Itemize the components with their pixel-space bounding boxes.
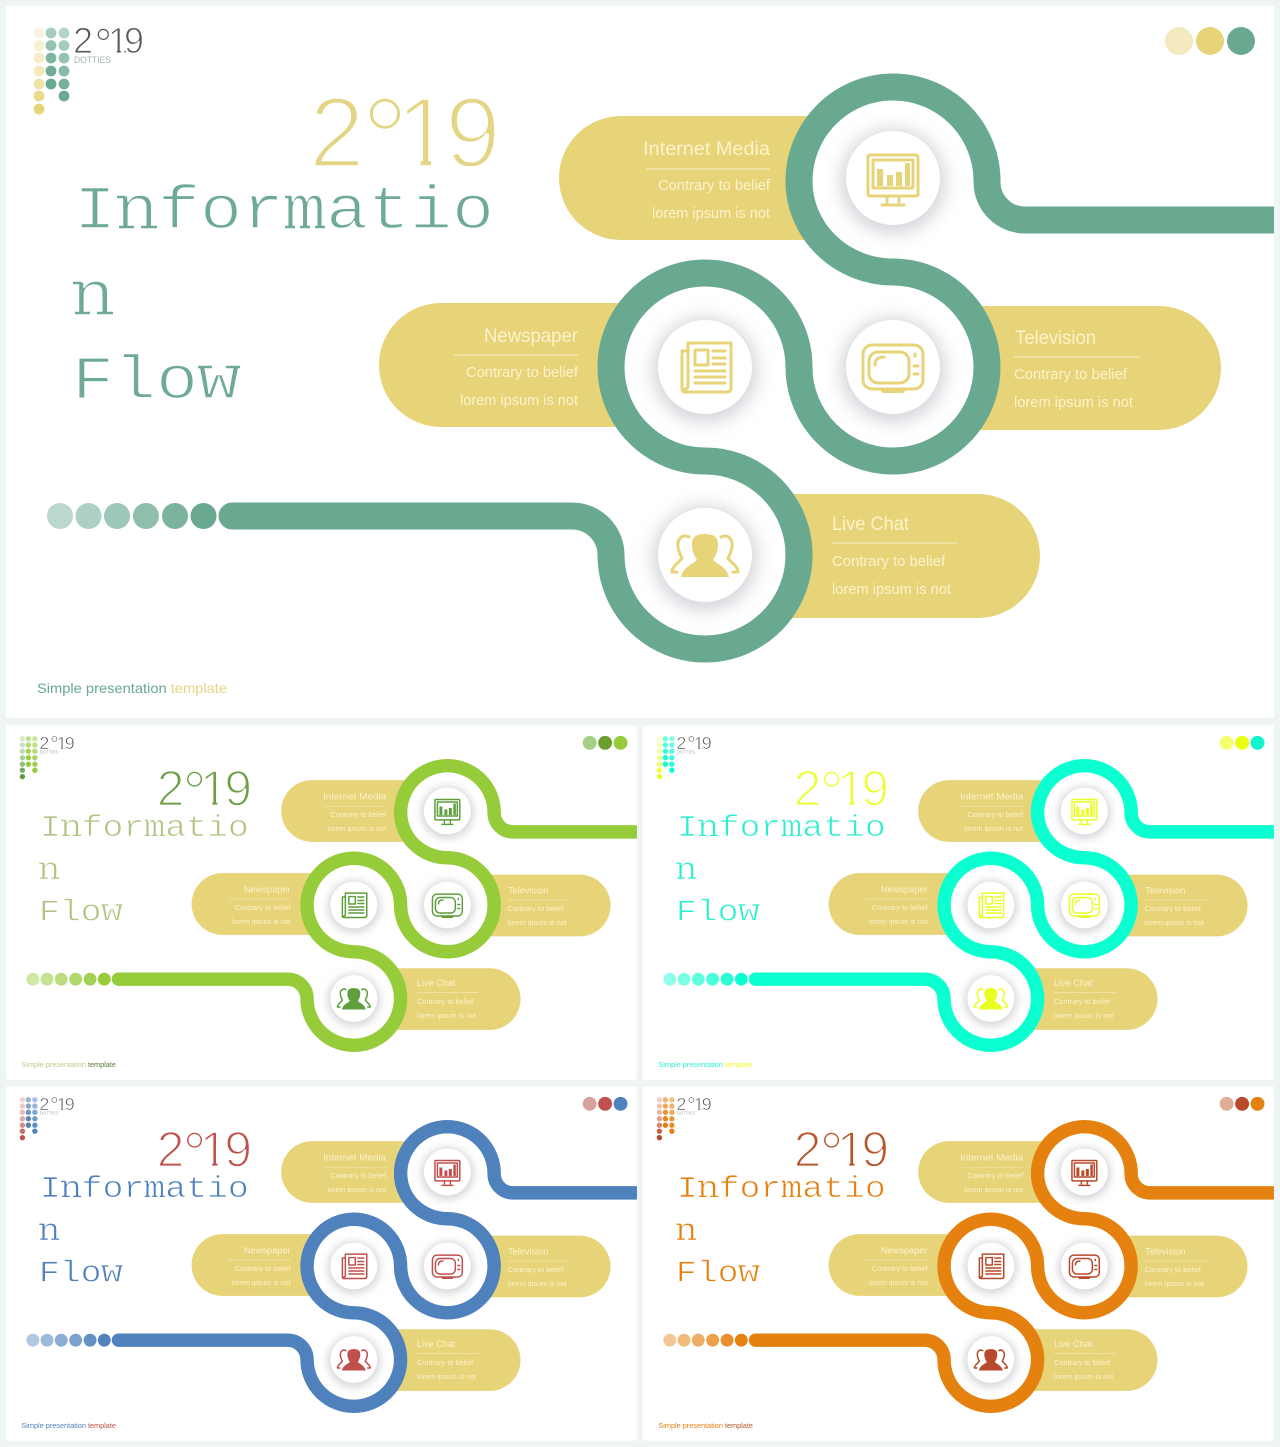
- title: °: [820, 758, 844, 825]
- text: Television: Television: [508, 886, 548, 897]
- label pills: [192, 769, 611, 1041]
- text: Live Chat: Contrary to belief: [1054, 997, 1111, 1006]
- logo: [657, 1093, 712, 1140]
- title: °: [183, 758, 207, 825]
- text: Newspaper: [229, 1246, 292, 1287]
- text: Television: Television: [1015, 328, 1096, 349]
- text: Internet Media: Internet Media: [960, 792, 1024, 803]
- text: Live Chat: Contrary to belief: [1054, 1358, 1111, 1367]
- icon: television: [1058, 881, 1110, 932]
- logo: 2: [676, 1094, 686, 1114]
- text: Internet Media: Contrary to belief: [330, 1171, 387, 1180]
- text: Television: [1014, 328, 1140, 411]
- icon: monitor: [1058, 787, 1110, 838]
- text: Internet Media: Internet Media: [323, 792, 387, 803]
- icon: monitor: [421, 787, 473, 838]
- dotted tail: [663, 973, 748, 986]
- text: Television: lorem ipsum is not: [1014, 394, 1134, 411]
- text: Internet Media: Internet Media: [643, 139, 770, 160]
- text: Newspaper: Newspaper: [881, 1246, 928, 1257]
- dotted tail: [47, 503, 216, 529]
- text: Live Chat: lorem ipsum is not: [417, 1372, 477, 1381]
- title: [676, 1108, 889, 1291]
- title: 2: [157, 1121, 184, 1177]
- title: Informatio: [677, 1172, 886, 1206]
- logo: 2: [39, 1094, 49, 1114]
- logo: 9: [702, 733, 712, 753]
- text: Newspaper: Newspaper: [881, 885, 928, 896]
- text: Newspaper: lorem ipsum is not: [232, 1278, 292, 1287]
- title: Informatio: [677, 811, 886, 845]
- text: Newspaper: lorem ipsum is not: [232, 917, 292, 926]
- text: Live Chat: [1054, 1339, 1116, 1381]
- dotted tail: [26, 1334, 111, 1347]
- footer: Simple presentation template: [658, 1062, 753, 1069]
- title: 1: [200, 760, 228, 816]
- icon: people: [965, 974, 1017, 1026]
- text: Newspaper: Contrary to belief: [872, 1264, 929, 1273]
- text: Live Chat: lorem ipsum is not: [1054, 1372, 1114, 1381]
- title: Informatio: [40, 1172, 249, 1206]
- text: Internet Media: Internet Media: [960, 1153, 1024, 1164]
- text: Newspaper: Contrary to belief: [872, 903, 929, 912]
- title: °: [820, 1119, 844, 1186]
- title: [39, 747, 252, 930]
- title: 1: [200, 1121, 228, 1177]
- title: 9: [445, 77, 501, 189]
- text: Television: Television: [1145, 1247, 1185, 1258]
- flow ribbon: [118, 766, 645, 1045]
- title: 2: [157, 760, 184, 816]
- title: 1: [837, 760, 865, 816]
- colour swatches: [583, 1097, 627, 1111]
- title: 9: [861, 1121, 889, 1177]
- text: Internet Media: lorem ipsum is not: [652, 205, 771, 222]
- logo: °: [50, 1093, 59, 1118]
- title: °: [183, 1119, 207, 1186]
- title: n: [676, 853, 697, 888]
- logo: DOTTIES: [677, 1111, 695, 1116]
- text: Internet Media: [960, 792, 1024, 833]
- title: Flow: [39, 1256, 123, 1291]
- label pills: [829, 769, 1248, 1041]
- panel: blue variant: [6, 1086, 645, 1441]
- text: Newspaper: [454, 326, 579, 409]
- title: [676, 747, 889, 930]
- text: Newspaper: [229, 885, 292, 926]
- icon: monitor: [1058, 1148, 1110, 1199]
- text: Internet Media: [960, 1153, 1024, 1194]
- title: °: [361, 73, 409, 207]
- footer: Simple presentation template: [658, 1423, 753, 1430]
- text: Live Chat: Live Chat: [1054, 1339, 1093, 1350]
- text: Newspaper: lorem ipsum is not: [869, 917, 929, 926]
- text: Internet Media: Internet Media: [323, 1153, 387, 1164]
- title: Informatio: [40, 811, 249, 845]
- text: Live Chat: Live Chat: [417, 978, 456, 989]
- logo: DOTTIES: [40, 750, 58, 755]
- footer: Simple presentation template: [21, 1062, 116, 1069]
- logo: 9: [65, 733, 75, 753]
- text: Television: Contrary to belief: [1145, 904, 1202, 913]
- text: Live Chat: [417, 1339, 479, 1381]
- panel: lime variant: [6, 725, 645, 1080]
- text: Internet Media: lorem ipsum is not: [964, 824, 1024, 833]
- colour swatches: [1220, 736, 1264, 750]
- logo: °: [50, 732, 59, 757]
- text: Newspaper: [866, 1246, 929, 1287]
- text: Newspaper: lorem ipsum is not: [869, 1278, 929, 1287]
- title: 9: [224, 1121, 252, 1177]
- text: Television: Television: [508, 1247, 548, 1258]
- title: Flow: [676, 1256, 760, 1291]
- title: [72, 50, 501, 417]
- panel: main slide, green: [6, 6, 1280, 718]
- logo: DOTTIES: [40, 1111, 58, 1116]
- title: Flow: [72, 347, 240, 417]
- panel: cyan variant: [643, 725, 1280, 1080]
- flow ribbon: [118, 1127, 645, 1406]
- text: Live Chat: Contrary to belief: [417, 1358, 474, 1367]
- icon: newspaper: [328, 881, 380, 932]
- logo: DOTTIES: [74, 55, 111, 65]
- text: Newspaper: lorem ipsum is not: [460, 392, 579, 409]
- icon: television: [1058, 1242, 1110, 1293]
- flow ribbon: [232, 87, 1280, 649]
- text: Television: Contrary to belief: [1145, 1265, 1202, 1274]
- text: Live Chat: lorem ipsum is not: [1054, 1011, 1114, 1020]
- text: Internet Media: Contrary to belief: [967, 1171, 1024, 1180]
- title: 1: [396, 77, 452, 189]
- icon: people: [965, 1335, 1017, 1387]
- icon: monitor: [421, 1148, 473, 1199]
- logo: 9: [65, 1094, 75, 1114]
- dotted tail: [26, 973, 111, 986]
- logo: 2: [39, 733, 49, 753]
- text: Newspaper: Contrary to belief: [235, 1264, 292, 1273]
- icon: monitor: [841, 129, 945, 233]
- text: Newspaper: Contrary to belief: [466, 364, 579, 381]
- title: n: [72, 263, 114, 333]
- text: Television: [1145, 1247, 1207, 1288]
- logo: 2: [73, 20, 93, 61]
- logo: °: [687, 732, 696, 757]
- label pills: [192, 1130, 611, 1402]
- logo: [657, 732, 712, 779]
- logo: 9: [702, 1094, 712, 1114]
- logo: 9: [124, 20, 144, 61]
- footer: Simple presentation template: [21, 1423, 116, 1430]
- text: Live Chat: Contrary to belief: [832, 553, 946, 570]
- icon: newspaper: [965, 1242, 1017, 1293]
- label pills: [379, 93, 1221, 640]
- logo: 1: [57, 1094, 67, 1114]
- text: Newspaper: Contrary to belief: [235, 903, 292, 912]
- panel: orange variant: [643, 1086, 1280, 1441]
- text: Internet Media: Contrary to belief: [967, 810, 1024, 819]
- text: Television: Contrary to belief: [1014, 366, 1128, 383]
- text: Internet Media: Contrary to belief: [330, 810, 387, 819]
- icon: people: [328, 974, 380, 1026]
- title: 2: [794, 1121, 821, 1177]
- icon: television: [841, 318, 945, 422]
- colour swatches: [1165, 27, 1255, 55]
- text: Newspaper: Newspaper: [484, 326, 579, 347]
- title: n: [676, 1214, 697, 1249]
- text: Television: [508, 886, 570, 927]
- flow ribbon: [755, 1127, 1280, 1406]
- text: Live Chat: Live Chat: [832, 514, 910, 535]
- logo: [20, 732, 75, 779]
- title: Flow: [676, 895, 760, 930]
- colour swatches: [583, 736, 627, 750]
- logo: 1: [694, 733, 704, 753]
- text: Internet Media: Contrary to belief: [658, 177, 771, 194]
- title: n: [39, 1214, 60, 1249]
- icon: people: [328, 1335, 380, 1387]
- title: 9: [861, 760, 889, 816]
- logo: [20, 1093, 75, 1140]
- title: n: [39, 853, 60, 888]
- title: [39, 1108, 252, 1291]
- text: Live Chat: lorem ipsum is not: [417, 1011, 477, 1020]
- text: Live Chat: [1054, 978, 1116, 1020]
- flow ribbon: [755, 766, 1280, 1045]
- text: Live Chat: lorem ipsum is not: [832, 581, 952, 598]
- icon: newspaper: [965, 881, 1017, 932]
- title: 2: [794, 760, 821, 816]
- footer: Simple presentation template: [37, 680, 227, 696]
- text: Internet Media: [643, 139, 771, 222]
- text: Television: Contrary to belief: [508, 904, 565, 913]
- text: Newspaper: Newspaper: [244, 885, 291, 896]
- logo: 1: [694, 1094, 704, 1114]
- text: Television: lorem ipsum is not: [508, 918, 568, 927]
- text: Live Chat: Live Chat: [417, 1339, 456, 1350]
- text: Live Chat: Live Chat: [1054, 978, 1093, 989]
- logo: DOTTIES: [677, 750, 695, 755]
- logo: 1: [108, 20, 128, 61]
- text: Television: [508, 1247, 570, 1288]
- text: Live Chat: Contrary to belief: [417, 997, 474, 1006]
- text: Television: lorem ipsum is not: [1145, 918, 1205, 927]
- title: Informatio: [74, 177, 494, 247]
- title: 2: [309, 77, 365, 189]
- title: 1: [837, 1121, 865, 1177]
- text: Internet Media: lorem ipsum is not: [327, 1185, 387, 1194]
- text: Television: [1145, 886, 1207, 927]
- logo: °: [687, 1093, 696, 1118]
- text: Internet Media: lorem ipsum is not: [964, 1185, 1024, 1194]
- icon: television: [421, 1242, 473, 1293]
- logo: 1: [57, 733, 67, 753]
- colour swatches: [1220, 1097, 1264, 1111]
- text: Internet Media: lorem ipsum is not: [327, 824, 387, 833]
- icon: newspaper: [653, 318, 757, 422]
- label pills: [829, 1130, 1248, 1402]
- logo: [34, 20, 144, 114]
- text: Television: lorem ipsum is not: [508, 1279, 568, 1288]
- text: Television: Television: [1145, 886, 1185, 897]
- logo: °: [94, 20, 112, 69]
- icon: people: [653, 506, 757, 610]
- text: Live Chat: [417, 978, 479, 1020]
- text: Newspaper: Newspaper: [244, 1246, 291, 1257]
- text: Television: lorem ipsum is not: [1145, 1279, 1205, 1288]
- logo: 2: [676, 733, 686, 753]
- icon: newspaper: [328, 1242, 380, 1293]
- text: Internet Media: [323, 1153, 387, 1194]
- icon: television: [421, 881, 473, 932]
- title: Flow: [39, 895, 123, 930]
- text: Live Chat: [832, 514, 957, 598]
- text: Internet Media: [323, 792, 387, 833]
- text: Newspaper: [866, 885, 929, 926]
- text: Television: Contrary to belief: [508, 1265, 565, 1274]
- title: 9: [224, 760, 252, 816]
- dotted tail: [663, 1334, 748, 1347]
